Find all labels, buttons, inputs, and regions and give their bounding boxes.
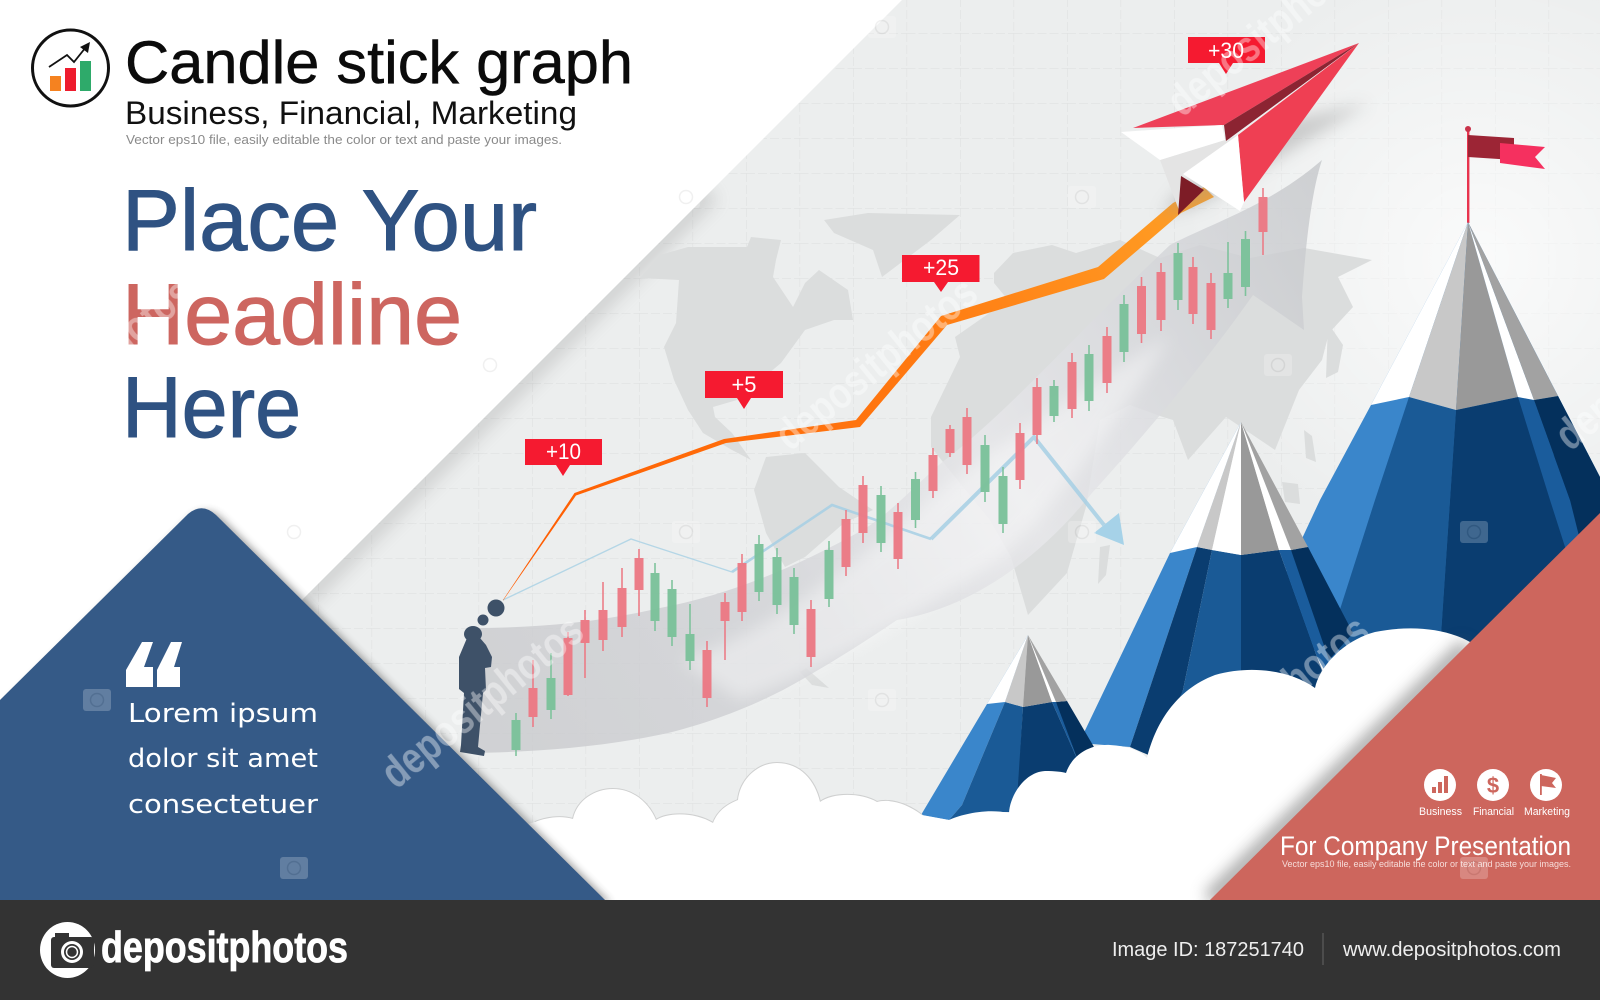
icon: business chart <box>1424 769 1456 801</box>
watermark layer: depositphotos <box>371 606 593 798</box>
text: icon labels: Marketing <box>1524 806 1570 818</box>
mountain: small <box>921 635 1094 820</box>
headline: Headline <box>122 267 462 363</box>
mountain: medium <box>1079 422 1353 760</box>
icon: dollar: $ <box>1487 773 1499 798</box>
text: company presentation: For Company Presentation <box>1280 831 1571 861</box>
callout: +10: +10 <box>546 439 581 464</box>
businessman silhouette with thought bubbles <box>459 600 504 756</box>
icon: camera logo <box>40 922 95 978</box>
headline <box>122 173 537 456</box>
title: Candle stick graph <box>125 29 633 96</box>
icon: flag on summit <box>1465 126 1545 223</box>
brand name: depositphotos <box>101 923 348 972</box>
callout: +25 <box>902 255 980 292</box>
callout: +30: +30 <box>1208 38 1244 63</box>
trend line: blue with arrow <box>503 437 1124 600</box>
watermark layer: depositphotos <box>1157 606 1379 798</box>
green candles <box>512 231 1250 756</box>
icon: dollar <box>1477 769 1509 801</box>
headline: Place Your <box>122 173 537 269</box>
headline: Here <box>122 360 301 456</box>
white clouds <box>520 628 1600 900</box>
callout: +30 <box>1188 37 1265 74</box>
callout: +5: +5 <box>732 372 756 397</box>
callout: +5 <box>705 371 783 409</box>
panel: red corner <box>1210 513 1600 900</box>
icon: quotation mark <box>126 642 182 687</box>
subtitle: Business, Financial, Marketing <box>125 95 577 131</box>
small caption: Vector eps10 file, easily editable the color or text and paste your images. <box>126 132 562 147</box>
trend line: orange rising <box>503 187 1214 601</box>
image id: Image ID: 187251740 <box>1112 939 1304 961</box>
paper plane <box>1121 43 1369 215</box>
red candles <box>528 188 1268 727</box>
text: icon labels: Financial <box>1473 806 1514 818</box>
footer bar <box>0 900 1600 1000</box>
text: quote body: dolor sit amet <box>128 744 318 774</box>
text: quote body: consectetuer <box>128 790 318 820</box>
text: company presentation: Vector eps10 file, easily editable the color or text and paste your images. <box>1282 859 1571 870</box>
text: icon labels: Business <box>1419 806 1462 818</box>
watermark layer: depositphotos <box>765 268 987 460</box>
website: www.depositphotos.com <box>1342 939 1561 961</box>
text: icon labels <box>1419 806 1570 818</box>
callout: +10 <box>525 439 602 476</box>
mountain: large <box>1250 222 1600 650</box>
callout: +25: +25 <box>923 255 959 280</box>
icon: marketing flag <box>1530 769 1562 801</box>
panel: blue quote triangle <box>0 508 611 903</box>
grey arc band behind candles <box>472 160 1322 753</box>
icon: header chart logo <box>32 30 108 106</box>
text: quote body <box>128 699 318 820</box>
panel: grey grid background <box>300 0 1600 900</box>
candlestick chart <box>512 188 1268 756</box>
world map <box>640 213 1372 688</box>
text: quote body: Lorem ipsum <box>128 699 318 729</box>
